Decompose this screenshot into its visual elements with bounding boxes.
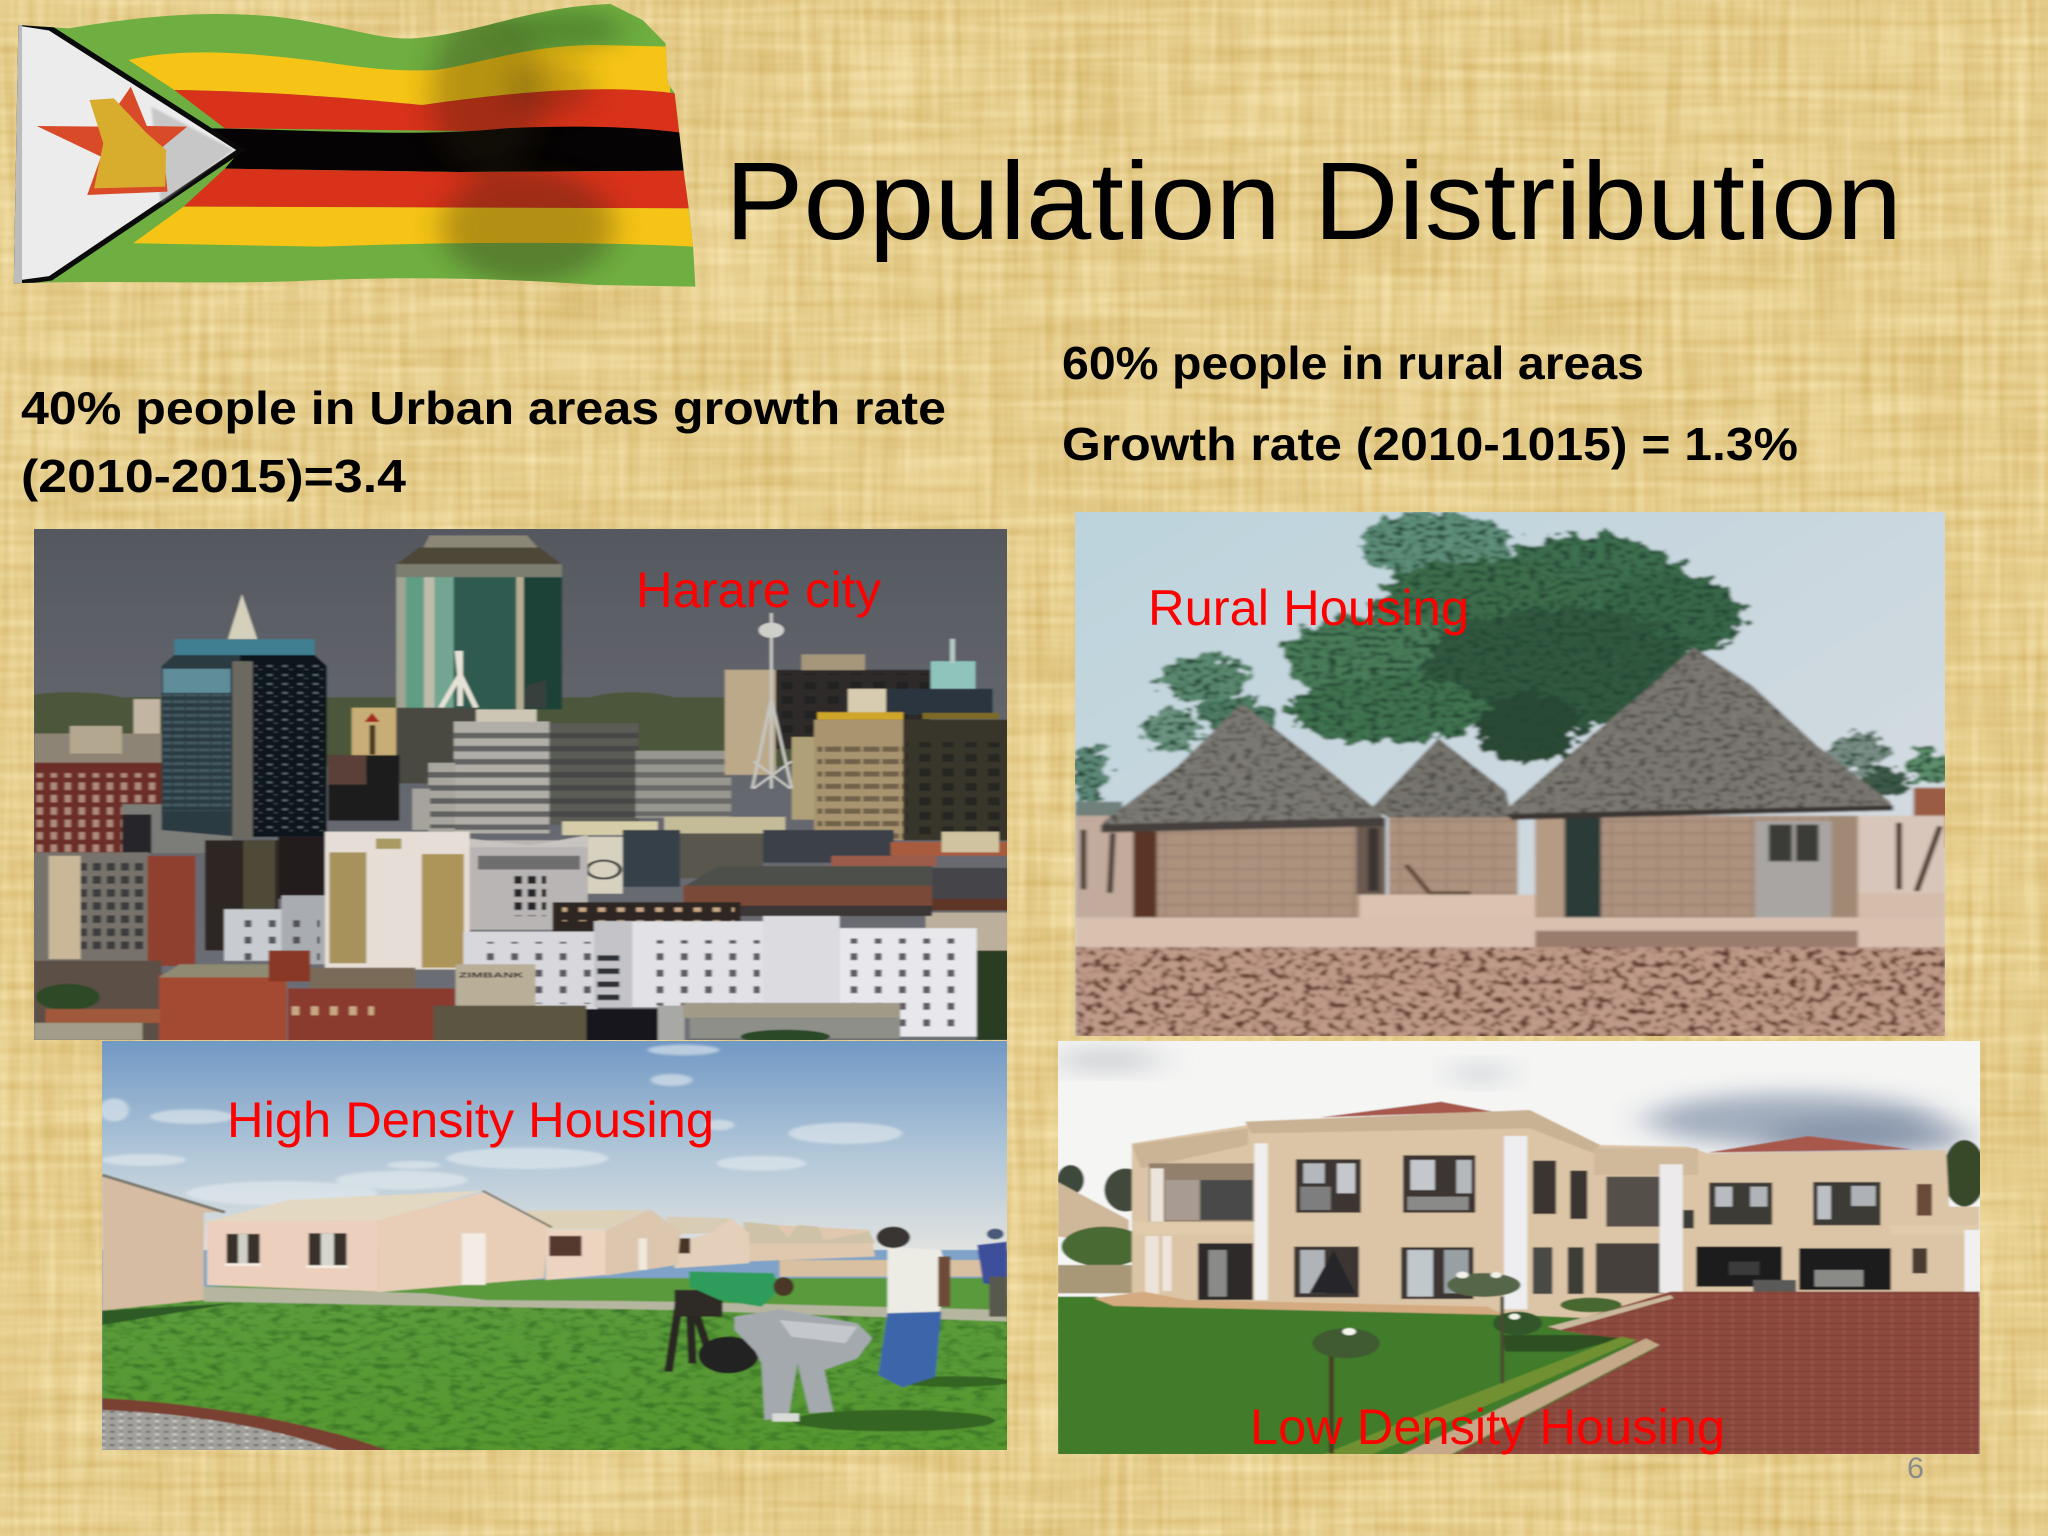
text block: urban population (21, 382, 946, 502)
photo: large two-storey house (1040, 1030, 2020, 1457)
photo: thatched huts (1075, 512, 1945, 1036)
panel: Harare city photo (34, 529, 1007, 1040)
panel: Rural housing photo (1075, 512, 1945, 1036)
text block: rural population (1062, 337, 1798, 470)
page number: 6 (1907, 1452, 1924, 1485)
label: High Density Housing: High Density Housing (227, 1092, 714, 1148)
title: Population Distribution (725, 140, 1902, 263)
text block: rural population: Growth rate (2010-1015) = 1.3% (1062, 418, 1798, 470)
panel: High density housing photo (90, 1030, 1049, 1453)
label: Low Density Housing: Low Density Housing (1250, 1399, 1725, 1455)
label: Rural Housing: Rural Housing (1148, 580, 1469, 636)
photo: city skyline (34, 535, 1007, 1040)
label: Harare city: Harare city (636, 562, 881, 618)
panel: Low density housing photo (1040, 1030, 2020, 1457)
text block: urban population: 40% people in Urban areas growth rate (21, 382, 946, 434)
text block: rural population: 60% people in rural areas (1062, 337, 1644, 389)
icon: waving Zimbabwe flag (14, 4, 696, 286)
photo: row of small houses and surveyors (90, 1030, 1049, 1453)
text block: urban population: (2010-2015)=3.4 (21, 450, 406, 502)
photo: city skyline: ZIMBANK (459, 971, 525, 979)
